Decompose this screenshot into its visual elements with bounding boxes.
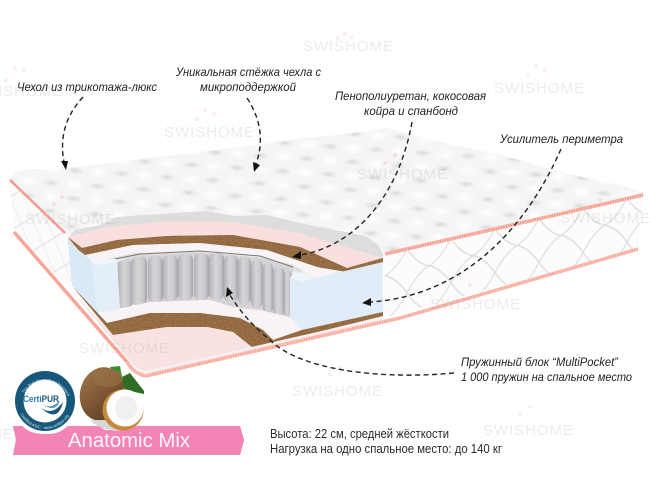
piping: bottom front (14, 232, 638, 376)
label: foam and coir: Пенополиуретан, кокосовая (335, 89, 487, 103)
lower coconut coir layer (73, 287, 383, 348)
watermarks: SWISHOME (164, 124, 254, 141)
label: spring block (461, 355, 632, 384)
watermarks over mattress: SWISHOME (357, 166, 447, 183)
badge: CertiPUR: Certified ASIC · www.certipur.org (20, 414, 70, 429)
top pink foam layer (68, 221, 383, 269)
watermarks: SWISHOME (303, 38, 393, 55)
piping: top left (10, 180, 65, 233)
icon: coconut (75, 363, 144, 430)
arrow: foam and coir (292, 122, 412, 259)
arrow: cover (61, 97, 83, 170)
watermarks over mattress: SWISHOME (430, 296, 520, 313)
right quilted side panel (383, 196, 643, 318)
specifications (270, 426, 502, 456)
badge: CertiPUR (15, 371, 75, 431)
watermarks (0, 32, 584, 443)
lower pink foam layer (73, 292, 383, 374)
label: foam and coir: койра и спанбонд (364, 104, 458, 118)
watermarks over mattress: SWISHOME (79, 340, 169, 357)
badge: CertiPUR: The Poly Foam Seal Standard (22, 379, 70, 396)
spring block top rim (115, 251, 293, 267)
label: foam and coir (335, 89, 487, 118)
mattress (10, 128, 643, 376)
label: stitching (175, 65, 321, 94)
specifications: Нагрузка на одно спальное место: до 140 кг (270, 441, 502, 456)
lower white spunbond layer (100, 300, 302, 340)
arrow: spring block (226, 287, 454, 375)
pocket springs (118, 253, 291, 322)
spring block backdrop (115, 253, 293, 320)
top white spunbond layer (85, 243, 334, 278)
piping: top right (385, 195, 643, 254)
right blue perimeter foam block (290, 262, 383, 330)
top coconut coir layer (68, 235, 383, 272)
label: stitching: микроподдержкой (200, 80, 296, 94)
label: spring block: 1 000 пружин на спальное место (461, 370, 632, 384)
grey back wall of the cut (68, 211, 383, 280)
arrow: stitching (247, 98, 260, 172)
white inner edge (127, 318, 383, 372)
watermarks over mattress: SWISHOME (25, 211, 115, 228)
watermarks over mattress: SWISHOME (560, 210, 650, 227)
watermarks: SWISHOME (494, 80, 584, 97)
ribbon title: Anatomic Mix (68, 430, 190, 452)
left quilted side panel (10, 180, 73, 292)
left blue perimeter foam block (68, 242, 120, 313)
label: cover: Чехол из трикотажа-люкс (17, 80, 157, 94)
label: stitching: Уникальная стёжка чехла с (175, 65, 321, 79)
arrow: perimeter (362, 149, 561, 306)
top quilted surface (10, 128, 643, 300)
watermarks: SWISHOME (483, 422, 573, 439)
label: spring block: Пружинный блок “MultiPocket” (461, 355, 619, 369)
watermarks: SWISHOME (292, 383, 382, 400)
ribbon (12, 369, 244, 455)
badge: CertiPUR: CertiPUR (23, 394, 59, 404)
label: perimeter: Усилитель периметра (499, 132, 623, 146)
specifications: Высота: 22 см, средней жёсткости (270, 426, 449, 441)
watermarks over mattress (25, 153, 650, 357)
